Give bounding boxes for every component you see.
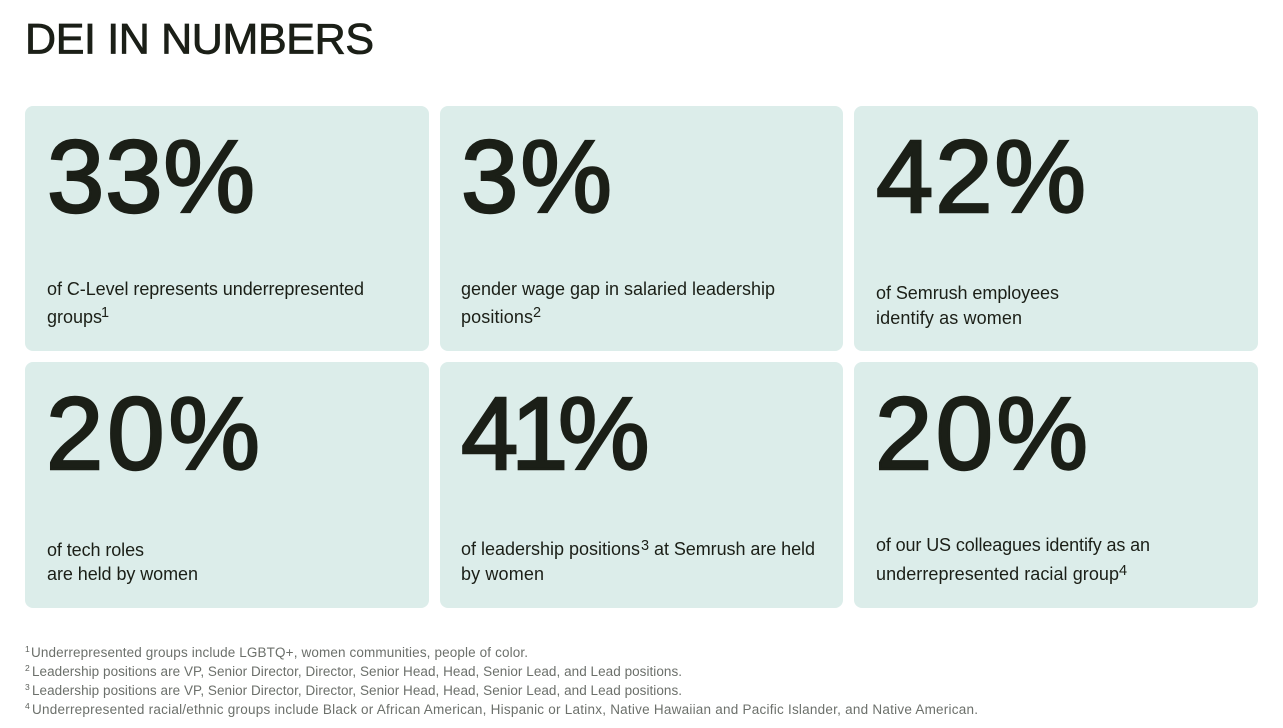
description: women employees <box>876 283 1059 328</box>
description: leadership: at Semrush are held <box>654 539 815 559</box>
description: leadership: of leadership positions <box>461 539 640 559</box>
description: racial group <box>876 535 1150 584</box>
description: C-Level: 1 <box>101 305 109 321</box>
panel: 33% C-Level <box>25 106 429 351</box>
footnotes: 4 <box>25 701 30 711</box>
description: tech roles <box>47 540 198 584</box>
stat: 20%: 20% <box>46 376 260 491</box>
description: wage gap <box>461 279 775 327</box>
panel: 20% racial group <box>854 362 1258 608</box>
panel: 41% leadership <box>440 362 843 608</box>
description: C-Level: of C-Level represents underrepresented <box>47 279 364 299</box>
description: racial group: underrepresented racial group <box>876 564 1119 584</box>
panel: 3% wage gap <box>440 106 843 351</box>
description: racial group: 4 <box>1119 563 1127 579</box>
footnotes: Leadership positions are VP, Senior Director, Director, Senior Head, Head, Senior Lead, and Lead positions. <box>32 664 682 679</box>
description: women employees: of Semrush employees <box>876 283 1059 303</box>
description: leadership: 3 <box>641 538 649 554</box>
description: C-Level: groups <box>47 307 102 327</box>
panel: 20% tech roles <box>25 362 429 608</box>
stat: 3%: 3% <box>461 119 612 234</box>
description: wage gap: gender wage gap in salaried leadership <box>461 279 775 299</box>
panel: 42% women employees <box>854 106 1258 351</box>
description: tech roles: of tech roles <box>47 540 144 560</box>
footnotes: 3 <box>25 682 30 692</box>
description: leadership: by women <box>461 564 544 584</box>
title: DEI IN NUMBERS <box>25 16 374 64</box>
description: racial group: of our US colleagues identify as an <box>876 535 1150 555</box>
stat: 42%: 42% <box>876 119 1086 234</box>
footnotes: Underrepresented groups include LGBTQ+, women communities, people of color. <box>31 645 528 660</box>
description: leadership <box>461 538 815 584</box>
stat: 33%: 33% <box>47 119 255 234</box>
description: tech roles: are held by women <box>47 564 198 584</box>
footnotes: Underrepresented racial/ethnic groups include Black or African American, Hispanic or Latinx, Native Hawaiian and Pacific Islander, and Native American. <box>32 702 978 717</box>
footnotes <box>25 644 978 717</box>
description: C-Level <box>47 279 364 327</box>
description: women employees: identify as women <box>876 308 1022 328</box>
description: wage gap: positions <box>461 307 533 327</box>
description: wage gap: 2 <box>533 305 541 321</box>
stat: 41%: 41% <box>461 376 650 491</box>
footnotes: Leadership positions are VP, Senior Director, Director, Senior Head, Head, Senior Lead, and Lead positions. <box>32 683 682 698</box>
stat: 20%: 20% <box>875 376 1088 491</box>
footnotes: 2 <box>25 663 30 673</box>
footnotes: 1 <box>25 644 30 654</box>
